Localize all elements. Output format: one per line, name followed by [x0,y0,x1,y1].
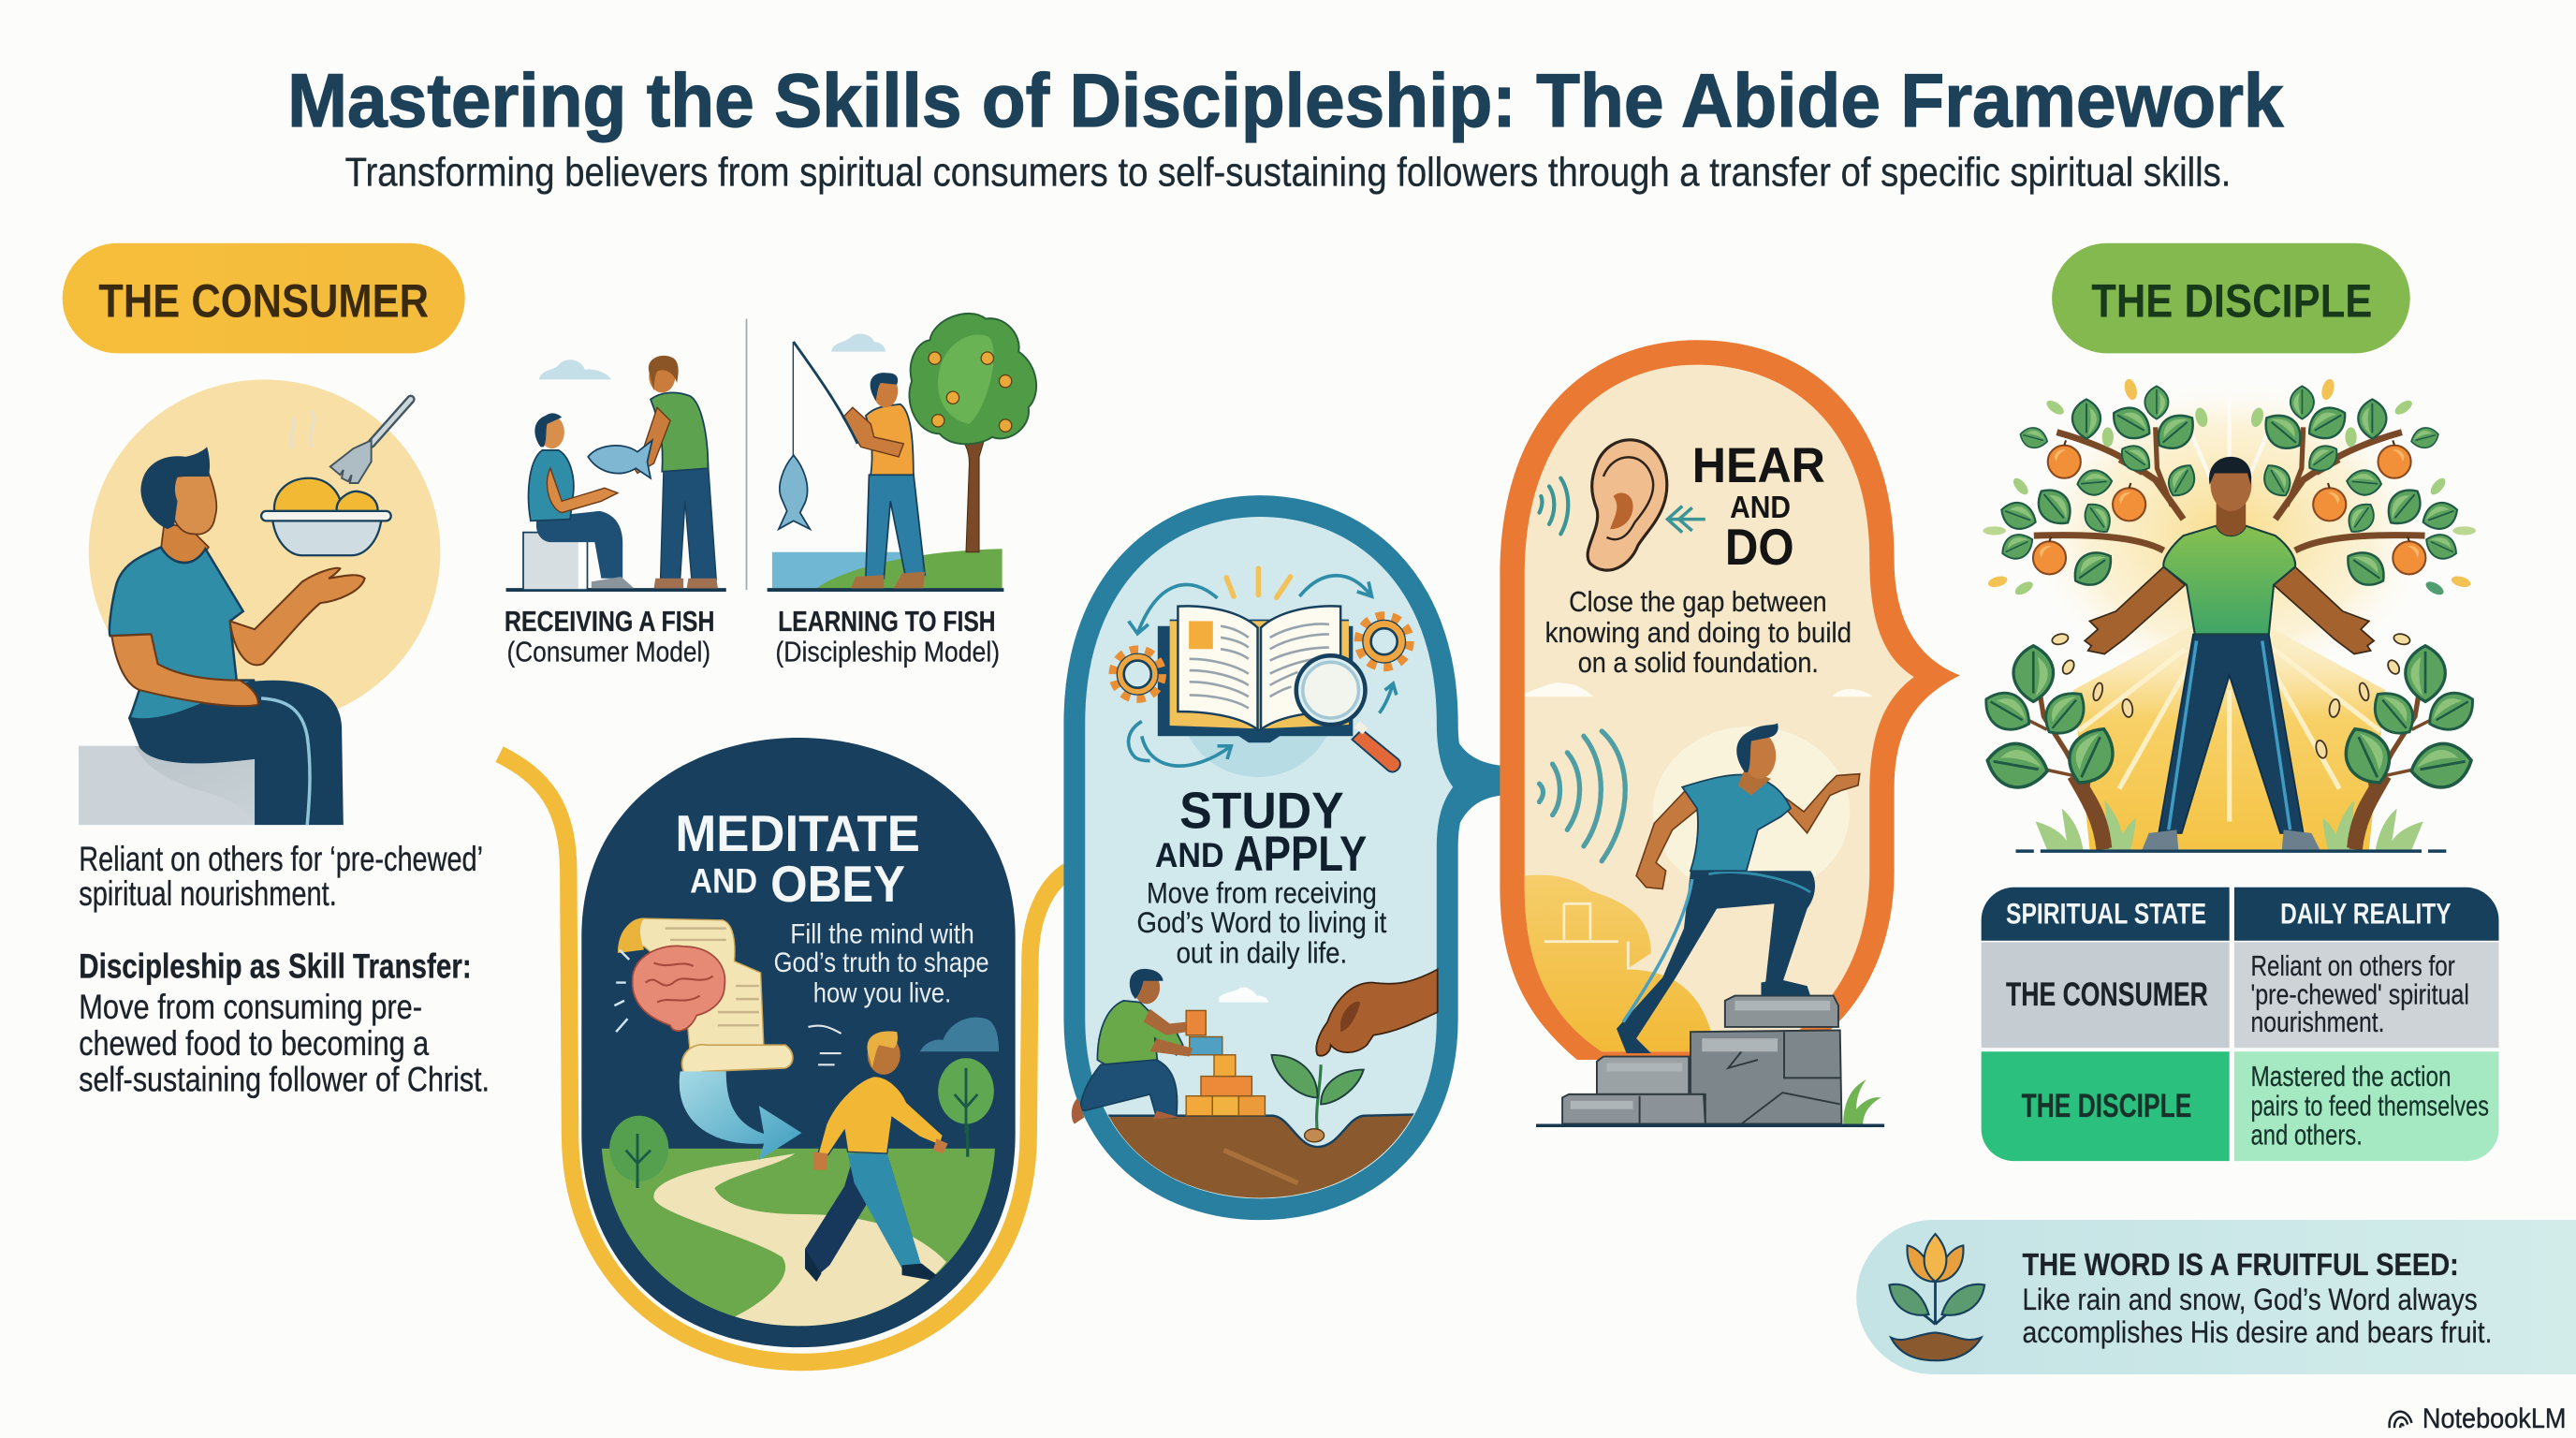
illustration: consumer being fed [79,379,440,825]
backdrop: hills and sign [1525,682,1873,1060]
row: disciple: Mastered the action [2250,1060,2452,1093]
callout text: Like rain and snow, God’s Word always [2023,1283,2478,1316]
description [1545,585,1852,679]
label: learning to fish: LEARNING TO FISH [778,605,996,638]
figure: walking disciple [805,1026,948,1282]
label: receiving a fish: RECEIVING A FISH [505,605,714,638]
right sapling [2323,646,2481,849]
heading: MEDITATE [675,805,920,862]
panel: meditate and obey [581,738,1016,1347]
description: on a solid foundation. [1578,646,1819,679]
icon: flowing arrow [680,1071,801,1160]
label: receiving a fish: (Consumer Model) [506,635,710,668]
row: consumer: 'pre-chewed' spiritual [2250,977,2469,1010]
callout text: THE WORD IS A FRUITFUL SEED: [2023,1248,2459,1283]
panel: hear and do [1500,340,1960,1125]
watermark: NotebookLM: NotebookLM [2422,1403,2566,1434]
comparison table [1982,888,2499,1161]
icon: scroll and brain [614,918,793,1074]
description: knowing and doing to build [1545,616,1852,649]
divider between fish scenes [746,318,748,590]
ground [2016,850,2446,852]
subtitle: Transforming believers from spiritual consumers to self-sustaining followers through a transfer of specific spiritual skills. [345,149,2231,195]
table headers [2006,896,2452,930]
table headers: SPIRITUAL STATE [2006,896,2206,930]
left tree branches and fruit [1983,377,2209,597]
heading: APPLY [1234,827,1367,882]
icon: ear [1540,440,1705,570]
icon: seed flower [1889,1234,1984,1360]
left sapling [1978,646,2136,849]
illustration: learning to fish [768,314,1036,590]
row: disciple: pairs to feed themselves [2250,1090,2489,1123]
illustration: receiving a fish [506,356,726,590]
icon: book, gears and magnifier [1114,568,1409,777]
landscape [592,1149,1003,1338]
foundation stones [1562,996,1841,1123]
text block: consumer description [79,840,490,1098]
text block: consumer description: chewed food to becoming a [79,1024,429,1063]
heading [1155,783,1367,882]
callout text [2023,1248,2492,1349]
badge: the consumer: THE CONSUMER [98,275,429,328]
callout: the word is a fruitful seed [1856,1220,2576,1374]
row: disciple [2022,1060,2489,1151]
description: Close the gap between [1569,585,1827,618]
description: Move from receiving [1147,875,1377,909]
panel: study and apply [1072,506,1467,1210]
heading: HEAR [1692,438,1825,493]
figure: open-armed disciple [2085,457,2374,849]
falling seeds [2051,632,2411,759]
description [1137,875,1386,969]
text block: consumer description: Move from consuming pre- [79,988,422,1026]
heading: STUDY [1179,783,1344,840]
heading [675,805,920,913]
right tree branches and fruit [2249,377,2476,597]
grass tuft [1843,1079,1881,1123]
table headers: DAILY REALITY [2280,896,2452,930]
row: consumer: Reliant on others for [2250,949,2455,982]
text block: consumer description: self-sustaining follower of Christ. [79,1060,490,1098]
row: disciple: and others. [2250,1118,2363,1151]
label: receiving a fish [505,605,714,668]
heading: AND [1155,836,1224,874]
heading [1692,438,1825,576]
callout text: accomplishes His desire and bears fruit. [2023,1315,2492,1349]
connector: teal link to hear and do [1453,731,1501,842]
text block: consumer description: Reliant on others for ‘pre-chewed’ [79,840,483,878]
heading: OBEY [770,856,905,913]
icon: sound waves [1540,731,1625,861]
title: Mastering the Skills of Discipleship: The Abide Framework [287,59,2284,143]
description: out in daily life. [1177,935,1347,969]
ground line [1536,1124,1884,1126]
heading: AND [690,862,757,901]
description: Fill the mind with [790,918,974,949]
row: consumer [2006,949,2469,1038]
description: God’s Word to living it [1137,905,1386,939]
text block: consumer description: spiritual nourishment. [79,874,337,913]
illustration: fruitful disciple [1978,377,2481,851]
description: God’s truth to shape [774,947,989,978]
label: learning to fish [775,605,1000,668]
icon: trees and cloud [609,1018,999,1188]
scene: soil, sprout and bricks [1072,969,1438,1208]
description: how you live. [813,978,951,1009]
badge: the consumer [63,243,465,353]
row: consumer: nourishment. [2250,1005,2385,1038]
badge: the disciple: THE DISCIPLE [2091,275,2372,328]
ribbon: yellow connector around meditate [500,755,1068,1362]
description [774,918,989,1009]
row: consumer: THE CONSUMER [2006,976,2208,1013]
badge: the disciple [2052,243,2410,353]
figure: climbing disciple [1617,723,1860,1053]
heading: AND [1730,491,1791,525]
row: disciple: THE DISCIPLE [2022,1088,2191,1124]
text block: consumer description: Discipleship as Skill Transfer: [79,946,472,985]
label: learning to fish: (Discipleship Model) [775,635,1000,668]
heading: DO [1725,519,1794,576]
